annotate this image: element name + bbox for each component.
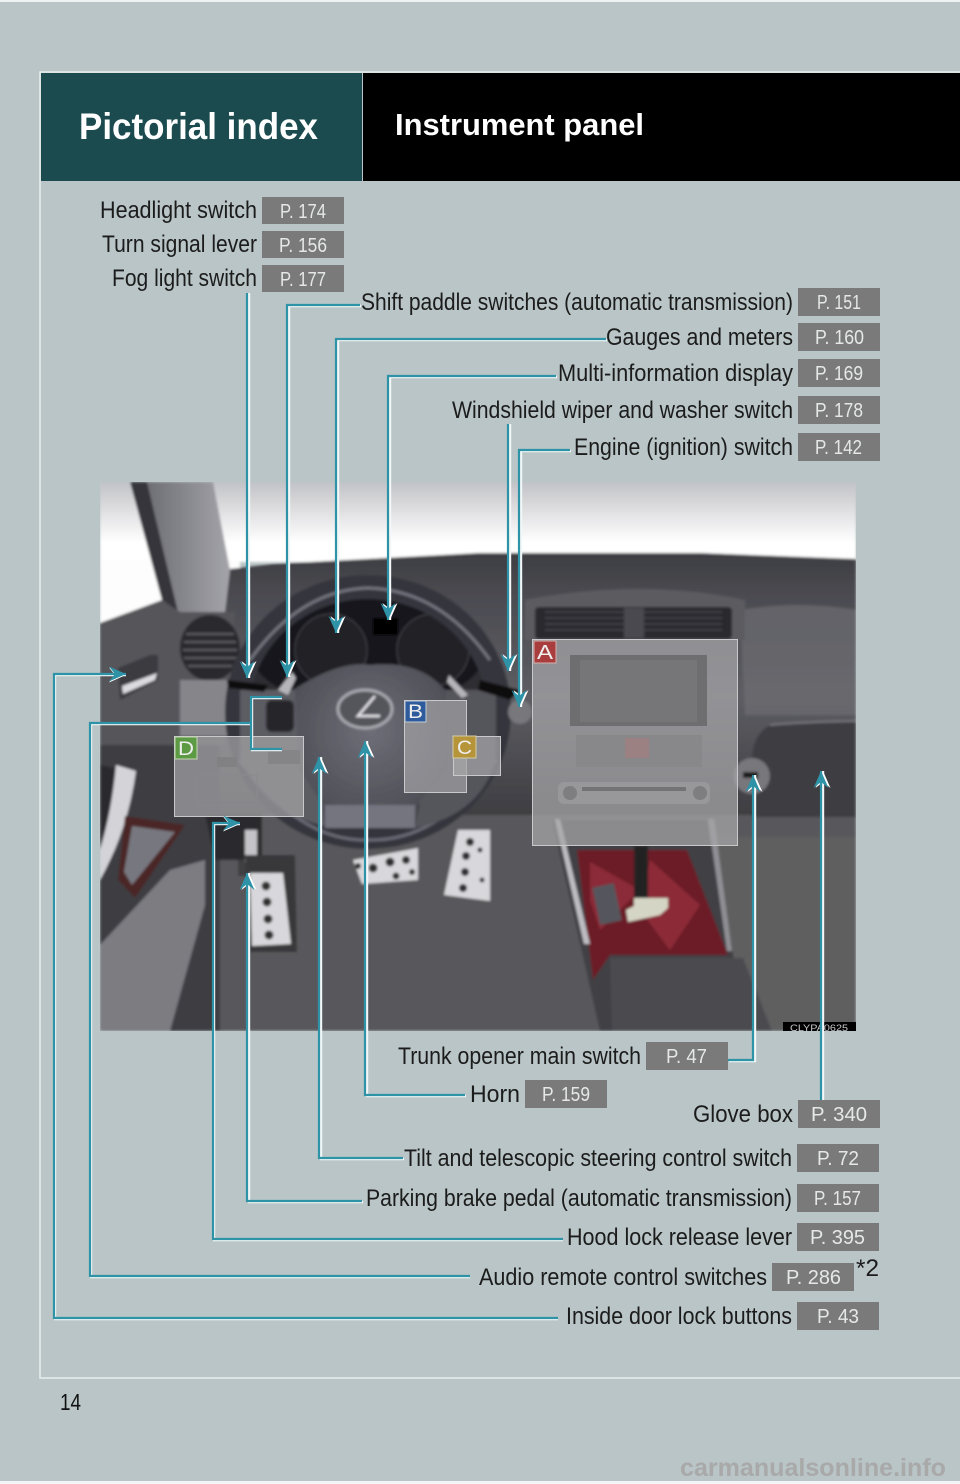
callout: Multi-information display: Multi-information display [558,360,793,387]
callout: Multi-information display: P. 169 [815,363,863,385]
callout: Horn: P. 159 [542,1084,590,1106]
center console [552,820,745,1031]
photo: car interior dashboard [100,482,856,1033]
section tab: Pictorial index: Pictorial index [79,106,318,147]
callout: Horn: Horn [470,1081,520,1108]
callout: Inside door lock buttons: Inside door lock buttons [566,1303,792,1330]
overlay panel A [532,640,738,846]
overlay panel C [453,736,500,776]
callout: Headlight switch: P. 174 [280,201,326,223]
arrow: hood lock release lever [213,823,563,1240]
arrow: shift paddle switches [287,305,361,677]
steering wheel rim [237,587,499,837]
arrow: multi-information display [388,376,557,620]
wheel controls and stalks [266,700,294,732]
callout: Audio remote control switches [479,1255,879,1291]
callout: Parking brake pedal: P. 157 [814,1188,861,1210]
callout: Glove box: P. 340 [811,1104,867,1126]
callout: Audio remote control switches: *2 [856,1255,879,1282]
arrow: audio remote control switches [90,697,470,1277]
callout: Windshield wiper and washer switch: Windshield wiper and washer switch [452,397,793,424]
wheel interior [238,588,498,836]
section title: Instrument panel [363,73,960,181]
floor [205,815,856,1031]
instrument cluster [250,592,486,708]
arrow: horn [365,741,466,1096]
arrow: tilt and telescopic [319,757,404,1159]
arrow: engine switch [519,450,571,707]
callout: Glove box: Glove box [693,1101,793,1128]
overlay panel B [404,700,466,792]
callout: Shift paddle switches: P. 151 [817,292,861,314]
arrow: parking brake pedal [247,873,363,1202]
callout: Turn signal lever: Turn signal lever [102,231,257,258]
callout: Tilt and telescopic steering control switch: P. 72 [817,1148,859,1170]
side air vent [180,615,240,681]
callout: Turn signal lever: P. 156 [279,235,327,257]
arrow: windshield wiper and washer switch [508,424,510,671]
arrow: glove box [821,771,823,1100]
callout: Parking brake pedal: Parking brake pedal (automatic transmission) [366,1185,792,1212]
Lexus emblem [338,690,392,728]
callout: Shift paddle switches: Shift paddle switches (automatic transmission) [361,289,793,316]
overlay panel D [174,736,304,816]
arrow: trunk opener [728,775,755,1061]
callout: Headlight switch: Headlight switch [100,197,257,224]
header band [41,73,960,181]
callout: Inside door lock buttons: P. 43 [817,1306,859,1328]
glove box [752,721,856,817]
arrow: fog light switch group [247,293,249,678]
overlay panel B: B [408,702,423,723]
callout: Hood lock release lever: P. 395 [810,1227,865,1249]
callout: Engine switch: P. 142 [815,437,862,459]
dashboard body [100,553,856,840]
callout: Audio remote control switches: Audio remote control switches [479,1264,767,1291]
overlay panel C: C [457,738,472,759]
code tag: CLYPA0625 [790,1023,848,1033]
callout: Fog light switch: Fog light switch [112,265,257,292]
steering wheel hub [292,664,448,828]
overlay panel A: A [537,642,554,664]
section tab: Pictorial index [41,73,362,181]
page number: 14 [60,1389,81,1415]
callout: Gauges and meters: P. 160 [815,327,864,349]
section title: Instrument panel: Instrument panel [395,107,644,142]
left door lower [100,745,220,1031]
arrow: gauges and meters [336,339,607,633]
trunk opener switch [734,758,770,794]
callout: Trunk opener main switch: P. 47 [666,1046,707,1068]
code tag [783,1022,856,1033]
callout: Glove box [693,1100,880,1128]
arrow: inside door lock buttons [54,674,558,1319]
center stack vent [535,607,732,639]
callout: Audio remote control switches: P. 286 [786,1267,841,1289]
callout: Gauges and meters: Gauges and meters [606,324,793,351]
callout: Windshield wiper and washer switch: P. 178 [815,400,863,422]
callout: Engine switch: Engine (ignition) switch [574,434,793,461]
pedals [205,815,262,860]
callout: Tilt and telescopic steering control switch: Tilt and telescopic steering control switch [404,1145,792,1172]
callout: Fog light switch: P. 177 [280,269,326,291]
watermark: carmanualsonline.info [680,1454,946,1482]
door handle [118,655,158,700]
callout: Horn [470,1080,607,1108]
callout: Trunk opener main switch: Trunk opener main switch [398,1043,641,1070]
overlay panel D: D [178,739,194,760]
A-pillar [145,482,230,612]
callout: Hood lock release lever: Hood lock release lever [567,1224,792,1251]
